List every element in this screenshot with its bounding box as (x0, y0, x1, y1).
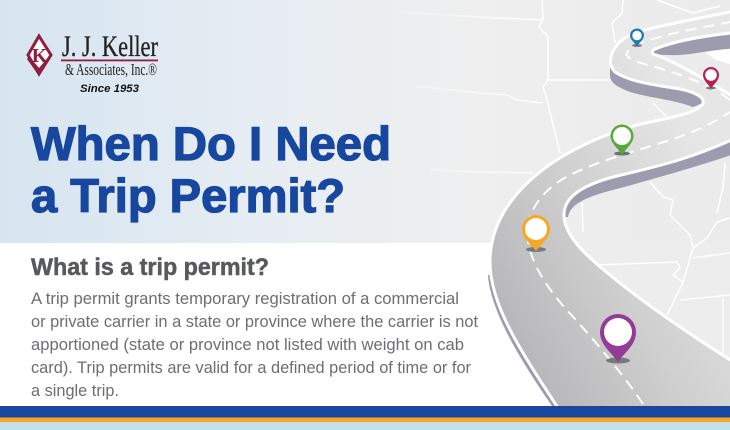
title (31, 118, 391, 223)
body text: apportioned (state or province not listed with weight on cab (31, 336, 464, 354)
white text panel (0, 243, 495, 406)
road centre dashes (527, 22, 730, 404)
body text: a single trip. (31, 382, 119, 400)
title: a Trip Permit? (31, 170, 345, 223)
pin: orange (522, 215, 550, 252)
logo diamond: K (32, 45, 48, 67)
logo name: J. J. Keller (62, 30, 158, 63)
header background (0, 0, 730, 243)
road surface (490, 10, 730, 414)
map of state borders (400, 0, 730, 355)
subheading: What is a trip permit? (31, 254, 269, 281)
pin: green (610, 124, 634, 156)
body text: card). Trip permits are valid for a defined period of time or for (31, 359, 471, 377)
title: When Do I Need (31, 118, 391, 171)
right map background (480, 243, 730, 406)
white inner bend of road (705, 46, 730, 64)
road walls (488, 32, 730, 406)
pin: crimson (703, 67, 719, 90)
body text (31, 290, 478, 400)
pin: purple (600, 314, 636, 364)
pin: blue (630, 29, 644, 47)
body text: A trip permit grants temporary registration of a commercial (31, 290, 459, 308)
logo subtitle: & Associates, Inc.® (65, 60, 157, 79)
logo tagline: Since 1953 (80, 83, 139, 95)
logo: J. J. Keller (27, 30, 158, 95)
footer stripes (0, 406, 730, 430)
body text: or private carrier in a state or province where the carrier is not (31, 313, 478, 331)
